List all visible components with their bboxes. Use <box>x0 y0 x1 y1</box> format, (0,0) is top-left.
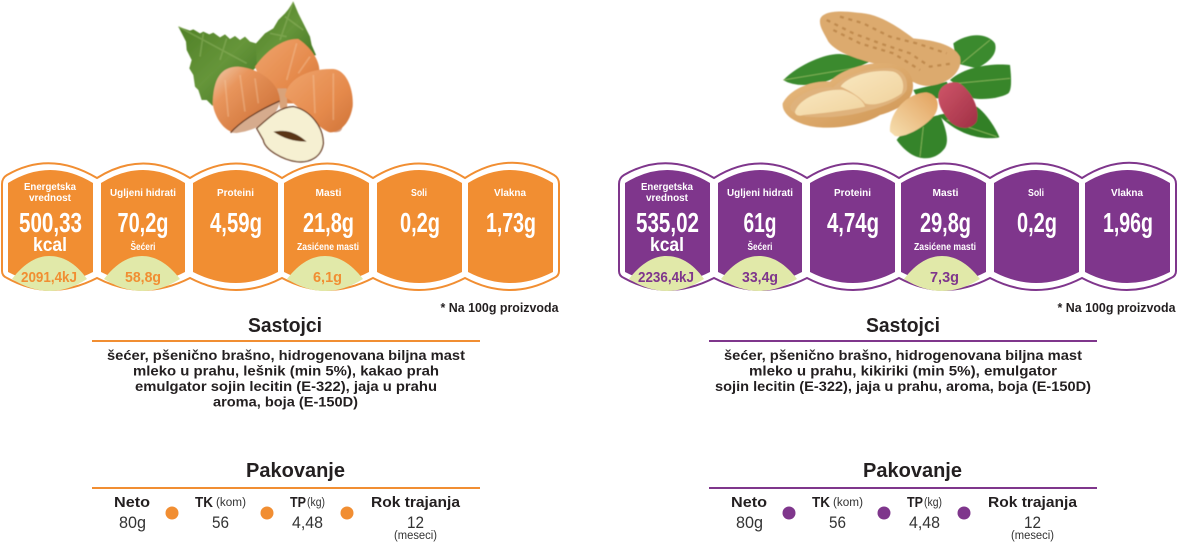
energy: 500,33 <box>19 207 82 238</box>
fats: 7,3g <box>930 269 959 286</box>
carbohydrates: Šećeri <box>748 240 773 253</box>
packaging: peanut: TK <box>812 494 830 511</box>
packaging: hazelnut: 4,48 <box>292 513 323 532</box>
fiber: Vlakna <box>494 188 526 199</box>
packaging: hazelnut <box>92 460 480 542</box>
ingredients: peanut: sojin lecitin (E-322), jaja u prahu, aroma, boja (E-150D) <box>715 378 1091 394</box>
green domes <box>629 256 980 291</box>
packaging: hazelnut: Pakovanje <box>246 460 345 482</box>
green domes <box>12 256 363 291</box>
nutrition strip: hazelnut <box>2 163 559 291</box>
ingredients: hazelnut: šećer, pšenično brašno, hidrogenovana biljna mast <box>107 347 465 363</box>
strip outline <box>2 163 559 290</box>
fats: Masti <box>932 188 959 199</box>
packaging: peanut: (kg) <box>924 497 942 509</box>
salt: 0,2g <box>1017 207 1057 238</box>
energy: 2236,4kJ <box>638 269 694 286</box>
energy: kcal <box>33 235 67 256</box>
fiber: 1,73g <box>486 207 536 238</box>
ingredients: hazelnut: emulgator sojin lecitin (E-322), jaja u prahu <box>135 378 437 394</box>
packaging: hazelnut: TK <box>195 494 213 511</box>
packaging: hazelnut: 56 <box>212 513 229 532</box>
salt: 0,2g <box>400 207 440 238</box>
packaging: hazelnut: Neto <box>114 494 150 511</box>
ingredients: peanut: Sastojci <box>866 315 940 337</box>
cells <box>625 170 1170 283</box>
fats: 21,8g <box>303 207 354 238</box>
fiber: Vlakna <box>1111 188 1143 199</box>
ingredients: hazelnut: mleko u prahu, lešnik (min 5%), kakao prah <box>133 362 439 378</box>
fats: 6,1g <box>313 269 342 286</box>
packaging: peanut: (meseci) <box>1011 530 1054 542</box>
ingredients: peanut: mleko u prahu, kikiriki (min 5%), emulgator <box>749 362 1058 378</box>
ingredients: peanut: šećer, pšenično brašno, hidrogenovana biljna mast <box>724 347 1082 363</box>
packaging: peanut: TP <box>907 494 923 511</box>
packaging: hazelnut: (kom) <box>216 497 246 509</box>
energy <box>19 182 82 286</box>
energy: vrednost <box>29 193 72 204</box>
proteins: Proteini <box>834 188 871 199</box>
packaging: peanut: 56 <box>829 513 846 532</box>
energy: 2091,4kJ <box>21 269 77 286</box>
salt <box>1017 188 1057 238</box>
fats: Zasićene masti <box>914 242 976 253</box>
fats: Masti <box>316 188 342 199</box>
cells <box>8 170 553 283</box>
illustration: peanuts with leaves <box>783 11 1011 158</box>
packaging: peanut: (kom) <box>833 497 863 509</box>
carbohydrates: Ugljeni hidrati <box>727 188 793 199</box>
energy <box>636 182 699 286</box>
packaging: hazelnut: Rok trajanja <box>371 494 461 511</box>
ingredients: hazelnut: aroma, boja (E-150D) <box>213 394 358 410</box>
packaging: hazelnut: 12 <box>407 513 424 532</box>
carbohydrates <box>110 188 176 286</box>
fats: Zasićene masti <box>297 242 359 253</box>
fats <box>914 188 976 286</box>
fats: 29,8g <box>920 207 971 238</box>
fats <box>297 188 359 286</box>
strip outline <box>619 163 1176 290</box>
energy: 535,02 <box>636 207 699 238</box>
salt: Soli <box>1028 188 1044 199</box>
fiber: 1,96g <box>1103 207 1153 238</box>
carbohydrates: 33,4g <box>742 269 778 286</box>
packaging: peanut: 80g <box>736 513 763 532</box>
proteins: 4,59g <box>210 207 262 238</box>
carbohydrates <box>727 188 793 286</box>
footnote: * Na 100g proizvoda <box>440 300 559 315</box>
salt: Soli <box>411 188 427 199</box>
nutrition strip: peanut <box>619 163 1176 291</box>
salt <box>400 188 440 238</box>
packaging: peanut: Pakovanje <box>863 460 962 482</box>
fiber <box>1103 188 1153 238</box>
energy: Energetska <box>24 182 76 193</box>
packaging: hazelnut: (meseci) <box>394 530 437 542</box>
packaging: hazelnut: TP <box>290 494 306 511</box>
ingredients: hazelnut: Sastojci <box>248 315 322 337</box>
proteins <box>827 188 879 238</box>
energy: kcal <box>650 235 684 256</box>
ingredients: hazelnut <box>92 315 480 410</box>
fiber <box>486 188 536 238</box>
packaging: peanut: Rok trajanja <box>988 494 1078 511</box>
carbohydrates: 70,2g <box>118 207 168 238</box>
packaging: hazelnut: 80g <box>119 513 146 532</box>
carbohydrates: Šećeri <box>130 240 156 253</box>
energy: vrednost <box>646 193 689 204</box>
packaging: hazelnut: (kg) <box>307 497 325 509</box>
carbohydrates: 61g <box>744 207 776 238</box>
ingredients: peanut <box>709 315 1097 394</box>
proteins: Proteini <box>217 188 254 199</box>
packaging: peanut: Neto <box>731 494 767 511</box>
packaging: peanut: 4,48 <box>909 513 940 532</box>
carbohydrates: Ugljeni hidrati <box>110 188 176 199</box>
packaging: peanut: 12 <box>1024 513 1041 532</box>
packaging: peanut <box>709 460 1097 542</box>
energy: Energetska <box>641 182 693 193</box>
proteins <box>210 188 262 238</box>
carbohydrates: 58,8g <box>125 269 161 286</box>
proteins: 4,74g <box>827 207 879 238</box>
illustration: hazelnuts with leaves <box>178 2 353 162</box>
